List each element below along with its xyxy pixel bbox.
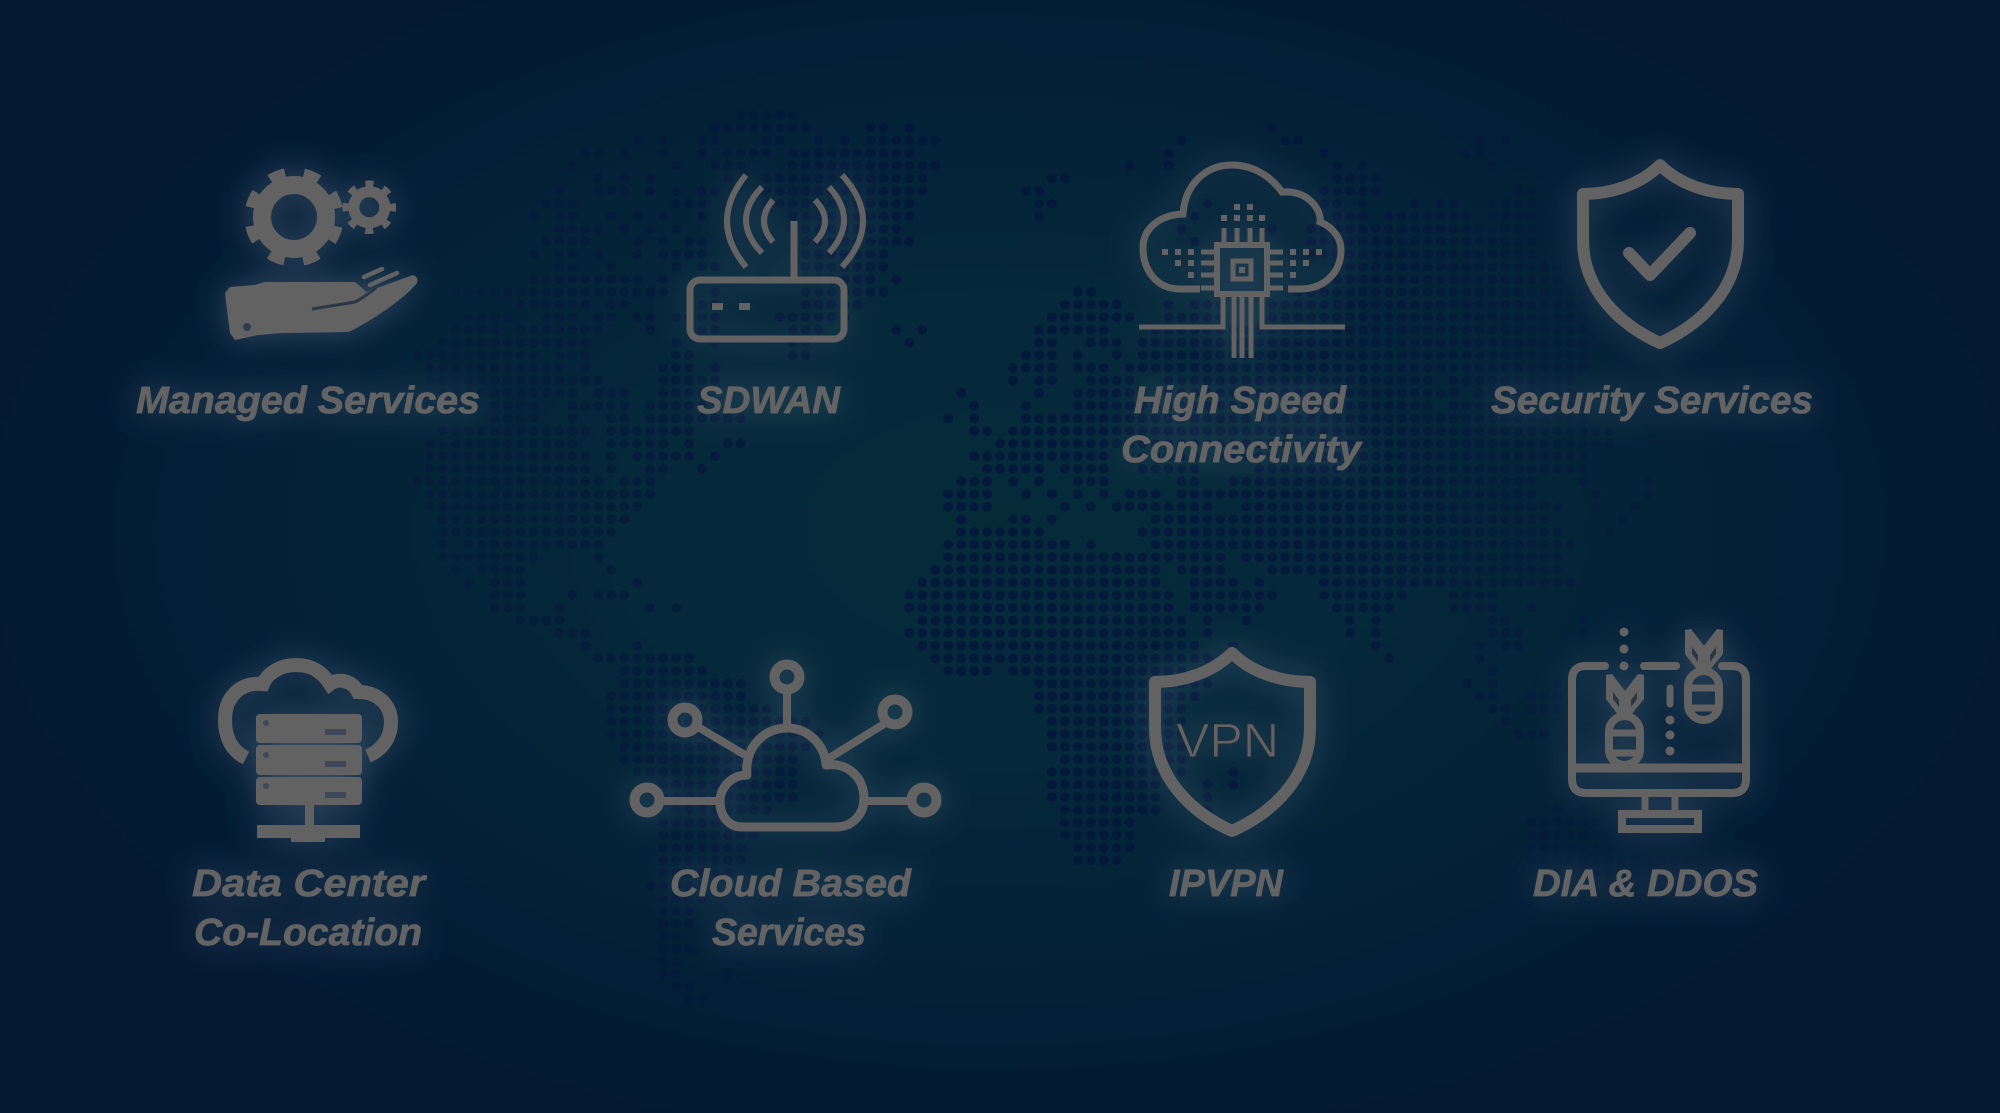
icon: shield with check (1583, 165, 1738, 343)
icon: wifi router (690, 175, 863, 339)
label: managed services: Managed Services (136, 380, 480, 422)
label: high speed connectivity (1121, 380, 1363, 471)
icon: cloud with chip (1139, 165, 1345, 358)
icon: cloud network (634, 664, 936, 827)
panel: high speed connectivity (1121, 165, 1363, 471)
upper bomb (1685, 629, 1723, 720)
lower bomb (1606, 674, 1644, 765)
label: data center co-location: Data Center (192, 863, 427, 905)
label: data center co-location: Co-Location (194, 912, 422, 954)
label: cloud based services (670, 863, 912, 954)
label: ipvpn: IPVPN (1169, 863, 1285, 905)
label: high speed connectivity: Connectivity (1121, 429, 1363, 471)
label: data center co-location (192, 863, 427, 954)
label: cloud based services: Services (712, 912, 866, 954)
icon: gears over open hand (225, 172, 418, 340)
label: security services: Security Services (1491, 380, 1813, 422)
panel: dia and ddos (1533, 628, 1758, 905)
falling dots (1620, 628, 1674, 756)
panel: security services (1491, 165, 1813, 422)
icon: vpn shield (1155, 653, 1310, 831)
panel: managed services (136, 172, 480, 422)
icon: cloud with server stack (225, 665, 391, 842)
panel: data center co-location (192, 665, 427, 954)
dotted world map (417, 115, 1713, 999)
label: cloud based services: Cloud Based (670, 863, 912, 905)
label: sdwan: SDWAN (697, 380, 842, 422)
label: high speed connectivity: High Speed (1134, 380, 1347, 422)
label: dia and ddos: DIA & DDOS (1533, 863, 1758, 905)
panel: sdwan (690, 175, 863, 422)
panel: cloud based services (634, 664, 936, 954)
icon: vpn shield: VPN (1176, 715, 1279, 768)
panel: ipvpn (1155, 653, 1310, 905)
icon: monitor with bombs (1572, 628, 1746, 829)
